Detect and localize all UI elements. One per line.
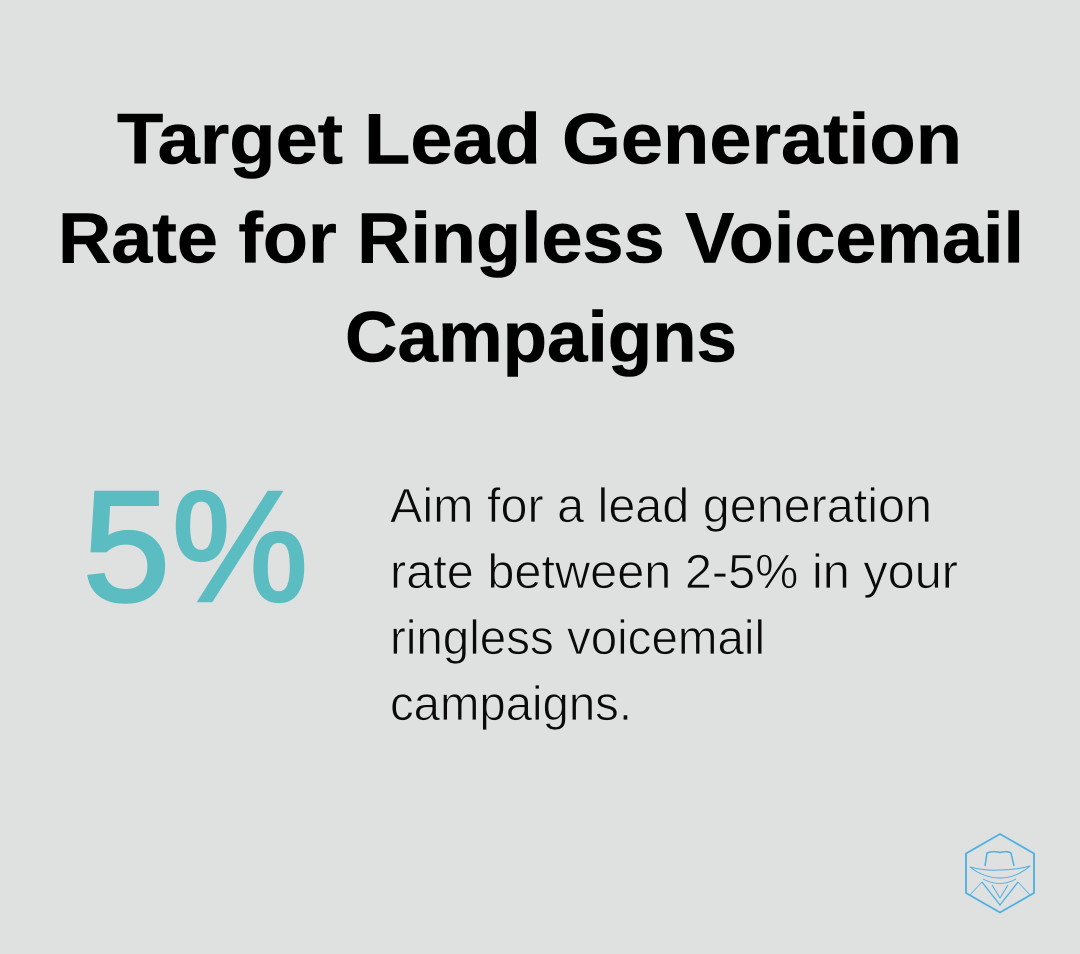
description text: campaigns.: [390, 678, 632, 731]
title: Target Lead Generation: [117, 100, 962, 180]
description text: rate between 2-5% in your: [390, 546, 958, 599]
title: Campaigns: [345, 298, 737, 378]
big stat: 5%: %: [172, 460, 308, 634]
description text: [390, 480, 958, 731]
icon: hexagon spy logo: [966, 834, 1034, 912]
title: [58, 100, 1024, 378]
description text: ringless voicemail: [390, 612, 765, 665]
title: Rate for Ringless Voicemail: [58, 200, 1024, 278]
big stat: 5%: [83, 460, 308, 634]
description text: Aim for a lead generation: [390, 480, 932, 533]
big stat: 5%: 5: [83, 460, 170, 634]
